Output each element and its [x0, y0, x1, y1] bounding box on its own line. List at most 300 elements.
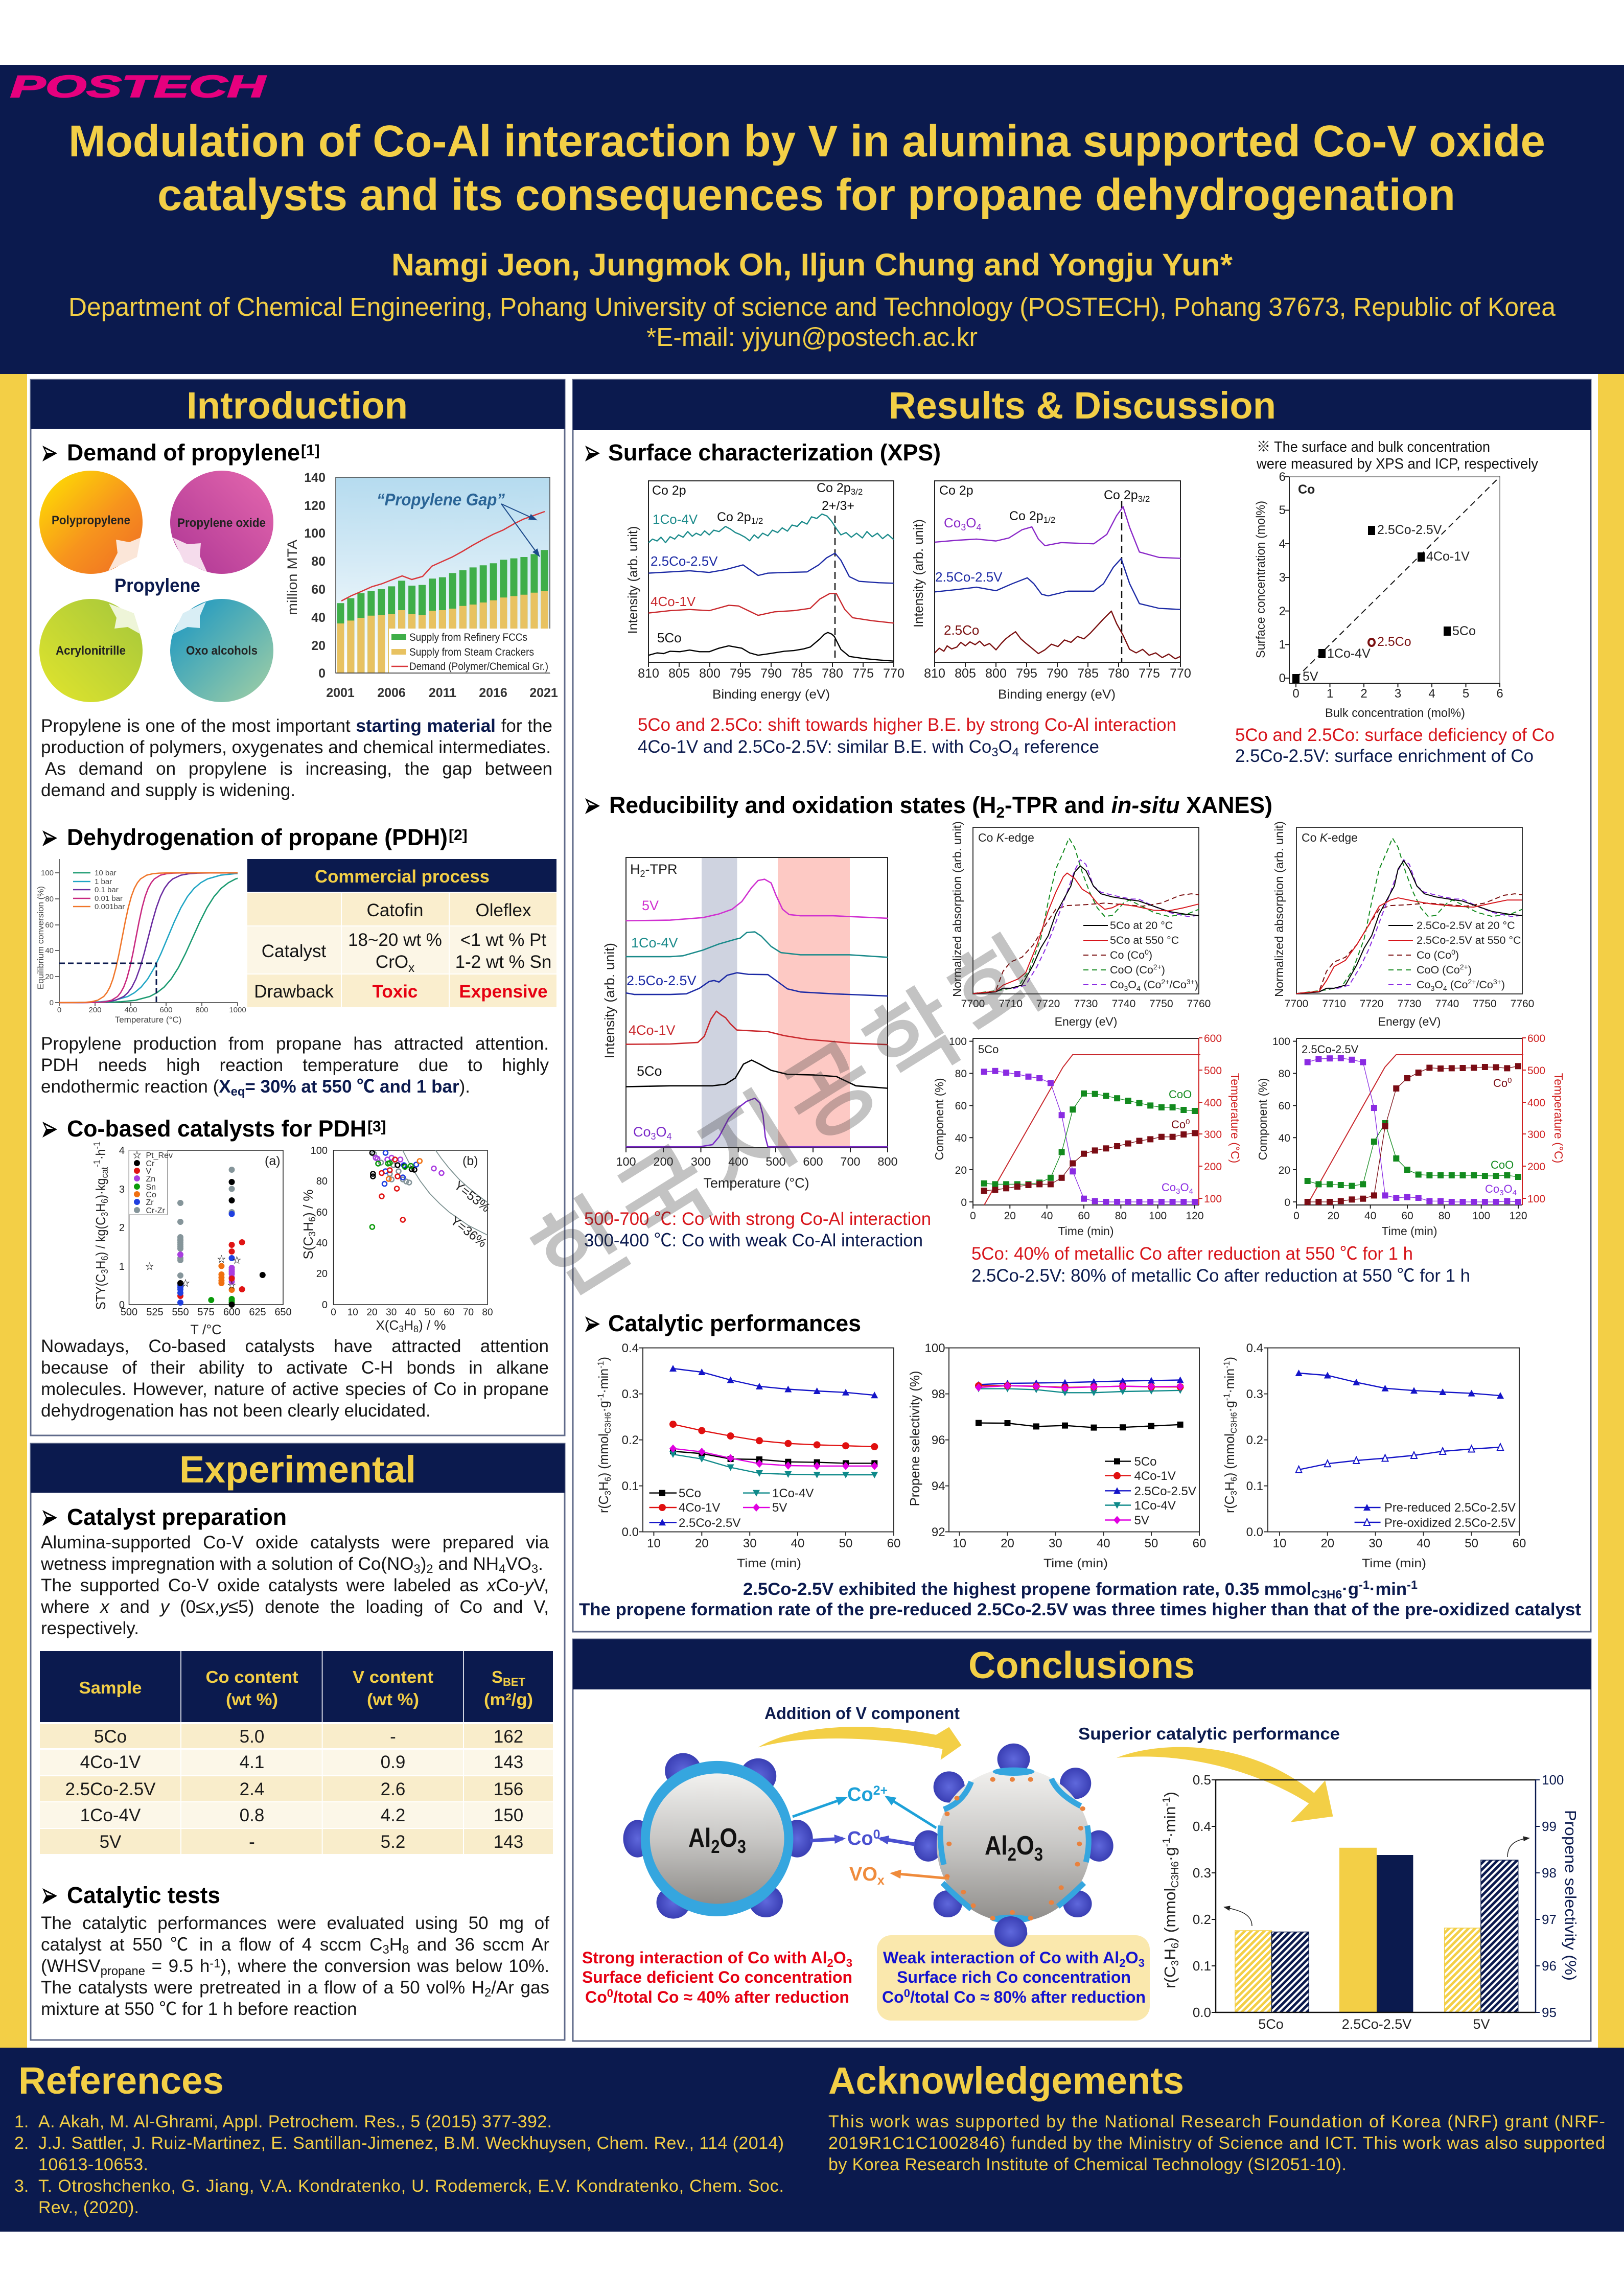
XANES chart: 5Co: 7760	[1187, 998, 1211, 1010]
XANES finding text	[971, 1244, 1470, 1286]
TPR finding text: 500-700 ℃: Co with strong Co-Al interaction	[584, 1209, 931, 1229]
propylene derivative circles	[39, 471, 273, 702]
line chart: pretreatment comparison	[1222, 1341, 1526, 1570]
component chart: 5Co: CoO	[1169, 1088, 1192, 1101]
line chart: pretreatment comparison: Pre-oxidized 2.5Co-2.5V	[1384, 1516, 1516, 1530]
schematic: catalyst spheres: Al2O3	[688, 1823, 746, 1857]
line chart: propene selectivity: 5Co	[1134, 1455, 1157, 1469]
bar chart: rate and selectivity: 0.4	[1193, 1819, 1211, 1834]
XPS finding text: 5Co and 2.5Co: shift towards higher B.E. by strong Co-Al interaction	[638, 715, 1176, 735]
text: PDH paragraph	[41, 1034, 549, 1099]
line chart: pretreatment comparison: 60	[1513, 1537, 1526, 1550]
surface vs bulk scatter chart: 0	[1279, 671, 1286, 685]
H2-TPR chart: 300	[691, 1155, 711, 1168]
propylene derivative circles: Oxo alcohols	[186, 644, 258, 658]
arrow: superior performance	[1117, 1747, 1333, 1822]
equilibrium conversion chart: 400	[124, 1006, 137, 1014]
side strips	[0, 374, 1624, 2048]
table: samples: 2.5Co-2.5V	[65, 1779, 156, 1799]
component chart: 5Co: Time (min)	[1058, 1224, 1114, 1238]
table: commercial process: Catalyst	[262, 941, 326, 961]
panel: conclusions	[573, 1639, 1591, 2041]
line chart: propene formation rate: 0.2	[622, 1433, 639, 1447]
bar chart: rate and selectivity: 97	[1542, 1912, 1557, 1927]
XANES chart: 5Co: CoO (Co2+)	[1110, 963, 1165, 976]
bar chart: propylene gap: Supply from Steam Crackers	[409, 646, 534, 658]
surface vs bulk scatter chart: Bulk concentration (mol%)	[1325, 706, 1465, 720]
XPS chart: supported catalysts: 2.5Co-2.5V	[651, 553, 718, 569]
acknowledgement text: This work was supported by the National Research Foundation of Korea (NRF) grant (NRF-	[828, 2112, 1605, 2131]
scatter chart (b): 40	[405, 1307, 416, 1318]
component chart: 2.5Co-2.5V: 400	[1527, 1097, 1545, 1109]
text: propylene demand paragraph: production of polymers, oxygenates and chemical intermediates.	[41, 737, 551, 757]
component chart: 5Co: 40	[955, 1132, 967, 1144]
schematic: catalyst spheres: Co2+	[847, 1783, 888, 1805]
heading: results: Results & Discussion	[889, 384, 1276, 427]
surface vs bulk scatter chart: Co	[1298, 482, 1315, 497]
table: samples: 4.2	[381, 1805, 405, 1825]
XANES chart: 5Co: 7730	[1074, 998, 1098, 1010]
scatter chart (b): 50	[424, 1307, 435, 1318]
table: commercial process: Drawback	[254, 982, 334, 1002]
line chart: propene selectivity: Propene selectivity (%)	[907, 1371, 922, 1506]
line chart: propene formation rate: r(C3H6) (mmolC3H6·g-1·min-1)	[596, 1357, 613, 1513]
watermark: 한국지공학회	[505, 900, 1066, 1322]
acknowledgement text: 2019R1C1C1002846) funded by the Ministry of Science and ICT. This work was also supported	[828, 2133, 1605, 2153]
XPS chart: references: Co 2p1/2	[1009, 509, 1055, 525]
surface vs bulk scatter chart: 4Co-1V	[1426, 549, 1470, 564]
scatter chart (b): 60	[316, 1207, 328, 1218]
scatter chart (b): (b)	[462, 1154, 478, 1168]
XPS chart: supported catalysts: 800	[699, 666, 721, 681]
XANES chart: 2.5Co-2.5V: Co (Co0)	[1417, 948, 1459, 961]
component chart: 2.5Co-2.5V: 200	[1527, 1161, 1545, 1173]
subheading: demand of propylene: [1]	[301, 442, 320, 459]
table: commercial process: Commercial process	[315, 867, 490, 887]
surface vs bulk scatter chart: 2.5Co	[1377, 635, 1411, 649]
scatter chart (a)	[92, 1142, 292, 1337]
acknowledgement text: by Korea Research Institute of Chemical Technology (SI2051-10).	[828, 2155, 1347, 2174]
scatter chart (a): ☆	[233, 1256, 241, 1265]
table: samples: (wt %)	[226, 1690, 278, 1709]
surface vs bulk scatter chart: Surface concentration (mol%)	[1254, 501, 1268, 658]
scatter chart (b): X(C3H8) / %	[376, 1317, 446, 1334]
text: catalytic tests paragraph	[41, 1913, 550, 2019]
XANES chart: 5Co: 7720	[1036, 998, 1060, 1010]
scatter chart (a): 500	[121, 1307, 137, 1318]
text: catalytic tests paragraph: catalyst at 550 ℃ in a flow of 4 sccm C3H8 and 36 sccm Ar	[41, 1935, 549, 1957]
bar chart: rate and selectivity: r(C3H6) (mmolC3H6·g-1·min-1)	[1161, 1792, 1181, 1988]
component chart: 2.5Co-2.5V: 2.5Co-2.5V	[1302, 1043, 1359, 1056]
text: PDH paragraph: PDH needs high reaction temperature due to highly	[41, 1055, 549, 1075]
surface concentration finding text	[1235, 725, 1555, 766]
component chart: 5Co: 60	[955, 1100, 967, 1112]
schematic: catalyst spheres	[623, 1704, 1340, 1949]
XPS chart: references: 800	[985, 666, 1007, 681]
line chart: pretreatment comparison: 50	[1465, 1537, 1478, 1550]
component chart: 2.5Co-2.5V: 500	[1527, 1065, 1545, 1077]
callout: weak interaction: Surface rich Co concentration	[897, 1968, 1131, 1986]
schematic: catalyst spheres: Superior catalytic performance	[1078, 1724, 1340, 1743]
callout: weak interaction: Weak interaction of Co with Al2O3	[883, 1949, 1145, 1969]
XPS chart: supported catalysts: Co 2p3/2	[817, 481, 863, 497]
XANES chart: 5Co: 7700	[961, 998, 985, 1010]
bar chart: propylene gap: 120	[304, 499, 326, 513]
text: catalytic tests paragraph: mixture at 550 ℃ for 1 h before reaction	[41, 1999, 357, 2019]
line chart: propene formation rate: 10	[647, 1537, 661, 1550]
bar chart: rate and selectivity: 95	[1542, 2005, 1557, 2020]
heading: conclusions: Conclusions	[968, 1644, 1195, 1686]
scatter chart (b): S(C3H6) / %	[300, 1189, 317, 1260]
surface vs bulk scatter chart: 6	[1279, 470, 1286, 484]
component chart: 2.5Co-2.5V: 60	[1279, 1100, 1290, 1112]
XANES chart: 2.5Co-2.5V	[1272, 821, 1534, 1028]
bar chart: propylene gap: 20	[311, 639, 326, 653]
line chart: propene selectivity: 10	[953, 1537, 966, 1550]
component chart: 2.5Co-2.5V: Co0	[1493, 1076, 1512, 1089]
line chart: propene formation rate: 5V	[772, 1501, 787, 1515]
surface vs bulk scatter chart: 4	[1279, 537, 1286, 551]
line chart: propene formation rate: 5Co	[679, 1487, 701, 1500]
reference list: 10613-10653.	[38, 2155, 148, 2174]
bar chart: rate and selectivity: 100	[1542, 1772, 1564, 1788]
surface vs bulk note	[1256, 439, 1538, 472]
scatter chart (b): 0	[322, 1300, 328, 1311]
table: commercial process: Oleflex	[476, 900, 531, 920]
surface vs bulk scatter chart: 5	[1279, 503, 1286, 517]
scatter chart (a): 525	[146, 1307, 164, 1318]
component chart: 5Co: 100	[949, 1036, 967, 1048]
line chart: pretreatment comparison: Pre-reduced 2.5Co-2.5V	[1384, 1501, 1516, 1515]
equilibrium conversion chart: Temperature (°C)	[115, 1015, 181, 1025]
equilibrium conversion chart: 0	[57, 1006, 61, 1014]
reference list: J.J. Sattler, J. Ruiz-Martinez, E. Santillan-Jimenez, B.M. Weckhuysen, Chem. Rev., 114 (2014)	[38, 2133, 784, 2153]
scatter chart (a): V	[146, 1167, 151, 1176]
scatter chart (a): 4	[119, 1145, 125, 1156]
scatter chart (b): 60	[444, 1307, 454, 1318]
line chart: propene formation rate: Time (min)	[737, 1557, 801, 1570]
scatter chart (b): 70	[463, 1307, 474, 1318]
bar chart: rate and selectivity: Propene selectivity (%)	[1562, 1810, 1580, 1981]
text: catalyst preparation paragraph: The supported Co-V oxide catalysts were labeled as xCo-yV,	[41, 1575, 549, 1595]
XPS chart: supported catalysts: 770	[883, 666, 904, 681]
TPR finding text	[584, 1209, 931, 1250]
table: samples: 5Co	[94, 1727, 127, 1747]
scatter chart (b): Y=36%	[448, 1214, 490, 1250]
scatter chart (b): 0	[331, 1307, 336, 1318]
propylene derivative circles: Propylene oxide	[177, 516, 266, 530]
XPS chart: supported catalysts: 790	[760, 666, 782, 681]
XPS chart: supported catalysts: 810	[638, 666, 659, 681]
subheading: dehydrogenation: [2]	[449, 827, 468, 844]
scatter chart (a): 600	[223, 1307, 240, 1318]
H2-TPR chart: 600	[803, 1155, 823, 1168]
line chart: propene selectivity: 94	[932, 1479, 945, 1493]
XANES finding text: 5Co: 40% of metallic Co after reduction at 550 ℃ for 1 h	[971, 1244, 1413, 1264]
schematic: catalyst spheres: VOx	[849, 1864, 885, 1888]
bar chart: rate and selectivity: 5V	[1473, 2016, 1490, 2032]
bar chart: propylene gap	[285, 471, 558, 700]
XANES chart: 5Co: Normalized absorption (arb. unit)	[950, 821, 964, 997]
line chart: pretreatment comparison: 30	[1368, 1537, 1382, 1550]
table: samples: 5V	[100, 1832, 122, 1852]
component chart: 5Co: 500	[1204, 1065, 1222, 1077]
bar chart: propylene gap: “Propylene Gap”	[377, 490, 505, 509]
arrow: addition of V	[758, 1727, 961, 1760]
component chart: 5Co: Co0	[1171, 1118, 1190, 1131]
text: catalyst preparation paragraph: respectively.	[41, 1618, 139, 1638]
equilibrium conversion chart: 1 bar	[95, 877, 112, 886]
scatter chart (a): Cr	[146, 1159, 155, 1168]
XANES chart: 2.5Co-2.5V: 7750	[1473, 998, 1497, 1010]
XPS chart: references: Co 2p	[939, 483, 973, 498]
XPS chart: references: 805	[955, 666, 976, 681]
scatter chart (a): Sn	[146, 1183, 156, 1192]
equilibrium conversion chart: 800	[195, 1006, 208, 1014]
scatter chart (b): Y=53%	[451, 1178, 493, 1215]
H2-TPR chart: 1Co-4V	[631, 935, 678, 950]
text: catalyst preparation paragraph: where x and y (0≤x,y≤5) denote the loading of Co and V,	[41, 1597, 549, 1617]
TPR finding text: 300-400 ℃: Co with weak Co-Al interaction	[584, 1231, 923, 1250]
subheading: reducibility: Reducibility and oxidation states (H2-TPR and in-situ XANES)	[609, 792, 1272, 821]
XANES chart: 2.5Co-2.5V: Co K-edge	[1302, 831, 1358, 844]
line chart: pretreatment comparison: 0.0	[1246, 1525, 1263, 1539]
title	[68, 117, 1545, 220]
text: propylene demand paragraph: Propylene is one of the most important starting material for the	[41, 716, 552, 736]
component chart: 5Co: 200	[1204, 1161, 1222, 1173]
table: samples: 143	[494, 1832, 523, 1852]
schematic: catalyst spheres: Co0	[847, 1827, 880, 1849]
equilibrium conversion chart: 0.01 bar	[95, 894, 123, 903]
component chart: 2.5Co-2.5V: Co3O4	[1485, 1182, 1517, 1197]
H2-TPR chart: 5V	[642, 898, 659, 913]
line chart: propene formation rate: 0.4	[622, 1341, 639, 1355]
reference list: 3.	[14, 2176, 29, 2196]
scatter chart (a): (a)	[265, 1154, 281, 1168]
H2-TPR chart: Intensity (arb. unit)	[602, 943, 617, 1058]
table: samples: V content	[353, 1667, 433, 1686]
table: commercial process: <1 wt % Pt	[460, 930, 546, 950]
panel: introduction	[31, 380, 565, 1435]
line chart: propene formation rate: 0.1	[622, 1479, 639, 1493]
subheading: co-based catalysts: [3]	[367, 1118, 386, 1135]
H2-TPR chart: 4Co-1V	[629, 1023, 676, 1038]
component chart: 5Co: Temperature (°C)	[1228, 1073, 1242, 1163]
surface vs bulk scatter chart: 2	[1279, 605, 1286, 618]
XPS chart: references: Co3O4	[944, 515, 982, 532]
scatter chart (a): ☆	[181, 1279, 190, 1288]
XANES chart: 2.5Co-2.5V: 2.5Co-2.5V at 550 °C	[1417, 934, 1521, 946]
component chart: 2.5Co-2.5V: Time (min)	[1381, 1224, 1437, 1238]
component chart: 2.5Co-2.5V: 300	[1527, 1129, 1545, 1141]
scatter chart (a): Zn	[146, 1175, 155, 1184]
left sphere	[623, 1753, 813, 1919]
component chart: 5Co: 120	[1186, 1210, 1204, 1222]
XPS chart: supported catalysts: Co 2p	[652, 483, 686, 498]
XPS chart: supported catalysts: 1Co-4V	[653, 512, 698, 527]
table: samples: 1Co-4V	[80, 1805, 141, 1825]
catalytic finding text: 2.5Co-2.5V exhibited the highest propene formation rate, 0.35 mmol C3H6·g-1·min-1	[743, 1578, 1418, 1601]
equilibrium conversion chart: 0.1 bar	[95, 886, 119, 894]
heading: acknowledgements: Acknowledgements	[828, 2059, 1184, 2102]
component chart: 5Co: 100	[1204, 1193, 1222, 1205]
component chart: 2.5Co-2.5V: Temperature (°C)	[1552, 1073, 1565, 1163]
table: samples: 5.0	[240, 1727, 264, 1747]
table: samples: 0.9	[381, 1752, 405, 1772]
bar chart: propylene gap: 2011	[429, 686, 456, 700]
header band	[0, 65, 1624, 374]
scatter chart (a): 575	[197, 1307, 215, 1318]
propylene derivative circles: Polypropylene	[52, 514, 130, 527]
bar chart: rate and selectivity: 98	[1542, 1865, 1557, 1881]
table: samples: 4.1	[240, 1752, 264, 1772]
XANES chart: 2.5Co-2.5V: 7730	[1398, 998, 1421, 1010]
panel: experimental	[31, 1444, 565, 2040]
component chart: 5Co: 0	[970, 1210, 976, 1222]
XPS chart: references: 770	[1170, 666, 1191, 681]
bar chart: rate and selectivity: 0.0	[1193, 2005, 1211, 2020]
affiliation: Department of Chemical Engineering, Pohang University of science and Technology (POSTECH), Pohang 37673, Republic of Korea	[68, 292, 1556, 321]
bar chart: propylene gap: Supply from Refinery FCCs	[409, 632, 527, 643]
line chart: propene formation rate: 40	[791, 1537, 804, 1550]
XANES chart: 2.5Co-2.5V: CoO (Co2+)	[1417, 963, 1472, 976]
surface vs bulk scatter chart	[1254, 470, 1503, 720]
table: samples	[40, 1651, 553, 1854]
callout: strong interaction	[582, 1949, 852, 2006]
XANES chart: 5Co: 5Co at 550 °C	[1110, 934, 1179, 946]
scatter chart (b): 30	[386, 1307, 397, 1318]
text: PDH paragraph: endothermic reaction (Xeq= 30% at 550 ℃ and 1 bar).	[41, 1077, 470, 1099]
scatter chart (a): Zr	[146, 1198, 154, 1207]
XPS chart: supported catalysts: 780	[822, 666, 843, 681]
XANES chart: 2.5Co-2.5V: 7760	[1511, 998, 1534, 1010]
line chart: pretreatment comparison: 10	[1273, 1537, 1286, 1550]
line chart: propene selectivity: 20	[1001, 1537, 1014, 1550]
line chart: propene selectivity: Time (min)	[1043, 1557, 1108, 1570]
XANES chart: 5Co: 7740	[1112, 998, 1135, 1010]
line chart: propene formation rate: 1Co-4V	[772, 1487, 814, 1500]
affiliation	[68, 292, 1556, 352]
line chart: propene selectivity	[907, 1341, 1206, 1570]
XPS chart: supported catalysts: 2+/3+	[822, 499, 854, 513]
text: co-based catalysts paragraph: Nowadays, Co-based catalysts have attracted attention	[41, 1336, 549, 1356]
line chart: pretreatment comparison: 40	[1417, 1537, 1430, 1550]
XPS chart: references: Binding energy (eV)	[998, 687, 1116, 702]
H2-TPR chart: 200	[653, 1155, 674, 1168]
title: Modulation of Co-Al interaction by V in alumina supported Co-V oxide	[68, 117, 1545, 166]
line chart: pretreatment comparison: 0.3	[1246, 1387, 1263, 1401]
scatter chart (a): Co	[146, 1191, 156, 1199]
XANES chart: 2.5Co-2.5V: 7710	[1322, 998, 1346, 1010]
callout: strong interaction: Surface deficient Co concentration	[582, 1968, 852, 1986]
H2-TPR chart	[602, 857, 898, 1191]
schematic: catalyst spheres: Addition of V component	[764, 1704, 960, 1723]
XANES chart: 2.5Co-2.5V: 7720	[1360, 998, 1383, 1010]
surface vs bulk scatter chart: 0	[1292, 687, 1300, 701]
table: samples: Co content	[205, 1667, 298, 1686]
scatter chart (a): ☆	[133, 1150, 141, 1160]
XPS chart: references: 795	[1016, 666, 1037, 681]
text: propylene demand paragraph: demand and supply is widening.	[41, 780, 295, 800]
acknowledgement text	[828, 2112, 1605, 2174]
component chart: 5Co: 60	[1078, 1210, 1090, 1222]
XPS chart: supported catalysts: 785	[791, 666, 813, 681]
callout: weak interaction	[877, 1916, 1150, 2021]
callout: strong interaction: Co0/total Co ≈ 40% after reduction	[585, 1987, 849, 2006]
line chart: propene selectivity: 60	[1193, 1537, 1206, 1550]
surface vs bulk note: ※ The surface and bulk concentration	[1257, 439, 1490, 455]
scatter chart (a): 2	[119, 1222, 125, 1234]
scatter chart (b): 100	[311, 1145, 328, 1156]
heading: introduction: Introduction	[187, 384, 408, 427]
line chart: propene formation rate: 50	[839, 1537, 852, 1550]
reference list: 2.	[14, 2133, 29, 2153]
scatter chart (a): ☆	[145, 1262, 154, 1271]
table: commercial process: Expensive	[459, 982, 548, 1002]
component chart: 5Co: 300	[1204, 1129, 1222, 1141]
scatter chart (a): ☆	[217, 1255, 226, 1264]
bar chart: propylene gap: 2021	[529, 686, 558, 700]
line chart: propene formation rate: 2.5Co-2.5V	[679, 1516, 740, 1530]
H2-TPR chart: 100	[616, 1155, 636, 1168]
scatter chart (a): Cr-Zr	[146, 1207, 165, 1215]
component chart: 5Co: 400	[1204, 1097, 1222, 1109]
line chart: pretreatment comparison: 0.4	[1246, 1341, 1263, 1355]
component chart: 5Co: Co3O4	[1162, 1181, 1193, 1196]
component chart: 2.5Co-2.5V: CoO	[1491, 1158, 1514, 1171]
XPS chart: references: 810	[924, 666, 945, 681]
equilibrium conversion chart: 600	[159, 1006, 173, 1014]
XANES chart: 2.5Co-2.5V: Co3O4 (Co2+/Co3+)	[1417, 978, 1505, 992]
component chart: 2.5Co-2.5V: 40	[1279, 1132, 1290, 1144]
XPS chart: supported catalysts: 4Co-1V	[651, 594, 696, 609]
XPS chart: references: 785	[1077, 666, 1099, 681]
component chart: 5Co: Component (%)	[933, 1078, 946, 1161]
surface vs bulk scatter chart: 1Co-4V	[1327, 646, 1371, 661]
table: commercial process: CrOx	[376, 952, 414, 975]
bar chart: propylene gap: 140	[304, 471, 326, 485]
bar chart: rate and selectivity: 5Co	[1258, 2016, 1284, 2032]
table: samples: (m²/g)	[484, 1690, 533, 1709]
line chart: pretreatment comparison: 0.2	[1246, 1433, 1263, 1447]
right sphere	[914, 1744, 1113, 1949]
component chart: 5Co: 80	[955, 1068, 967, 1080]
bar chart: rate and selectivity	[1161, 1772, 1580, 2032]
text: catalytic tests paragraph: The catalysts were pretreated in a flow of a 50 vol% H2/Ar gas	[41, 1978, 549, 2000]
line chart: propene formation rate: 20	[695, 1537, 709, 1550]
bar chart: propylene gap: 2016	[479, 686, 507, 700]
subheading: catalytic tests: Catalytic tests	[67, 1882, 220, 1908]
surface vs bulk note: were measured by XPS and ICP, respectively	[1256, 456, 1538, 472]
bar chart: rate and selectivity: 99	[1542, 1819, 1557, 1834]
equilibrium conversion chart: 1000	[229, 1006, 246, 1014]
component chart: 2.5Co-2.5V: 80	[1279, 1068, 1290, 1080]
scatter chart (b): 10	[347, 1307, 358, 1318]
component chart: 2.5Co-2.5V: 20	[1328, 1210, 1339, 1222]
affiliation: *E-mail: yjyun@postech.ac.kr	[646, 322, 978, 352]
footer band	[0, 2048, 1624, 2232]
H2-TPR chart: 5Co	[637, 1063, 662, 1079]
scatter chart (a): 550	[172, 1307, 189, 1318]
line chart: pretreatment comparison: 0.1	[1246, 1479, 1263, 1493]
surface vs bulk scatter chart: 1	[1279, 638, 1286, 652]
text: catalyst preparation paragraph	[41, 1533, 549, 1638]
surface vs bulk scatter chart: 3	[1395, 687, 1401, 701]
title: catalysts and its consequences for propane dehydrogenation	[157, 170, 1455, 220]
bar chart: propylene gap: 40	[311, 611, 326, 625]
component chart: 2.5Co-2.5V: 120	[1509, 1210, 1527, 1222]
component chart: 2.5Co-2.5V: 80	[1439, 1210, 1450, 1222]
